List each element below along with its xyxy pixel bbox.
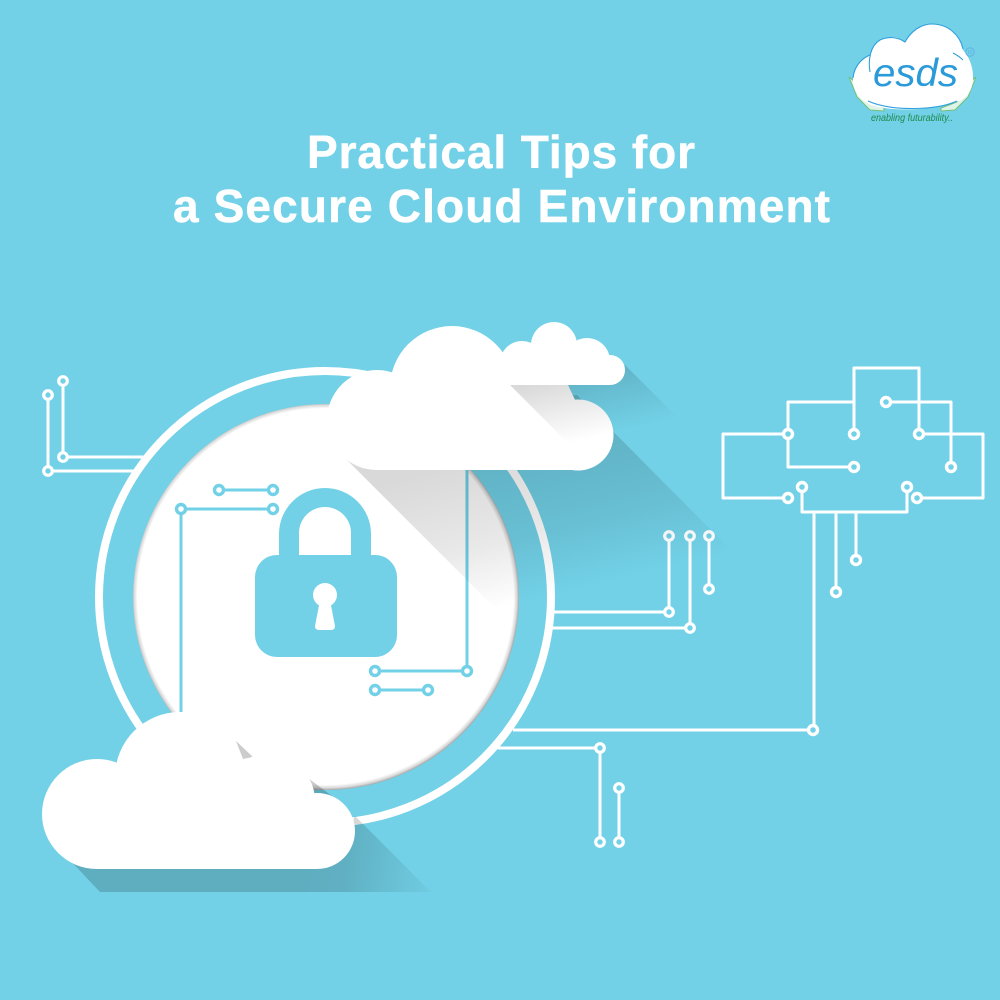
logo wordmark: esds — [873, 52, 958, 95]
padlock keyhole — [313, 583, 337, 630]
logo tagline: enabling futurability.. — [871, 112, 953, 124]
circuit: inside disc — [176, 465, 472, 720]
logo registered mark: R — [968, 50, 973, 56]
logo: esds — [849, 24, 976, 124]
circuit: middle right — [552, 532, 713, 632]
cloud: bottom — [42, 712, 355, 869]
cloud: small — [500, 322, 625, 385]
outer ring — [99, 371, 551, 823]
shadow: bottom cloud notches — [236, 741, 332, 796]
logo hands — [849, 77, 976, 111]
padlock shackle — [279, 488, 371, 560]
logo cloud outline arcs — [853, 24, 963, 108]
icon: padlock — [255, 488, 397, 657]
padlock body — [255, 555, 397, 657]
long shadow: large cloud — [345, 395, 820, 640]
title — [173, 126, 830, 232]
long shadow: bottom cloud — [66, 816, 431, 892]
circuit: left — [44, 377, 144, 475]
title: a Secure Cloud Environment — [173, 180, 830, 232]
circuit: cloud-shaped network — [513, 368, 983, 734]
logo cloud — [853, 24, 973, 109]
title: Practical Tips for — [307, 126, 695, 178]
long shadow: small cloud — [510, 365, 710, 450]
inner disc — [133, 404, 519, 790]
circuit: lower right — [498, 744, 623, 846]
cloud: large — [327, 326, 614, 470]
